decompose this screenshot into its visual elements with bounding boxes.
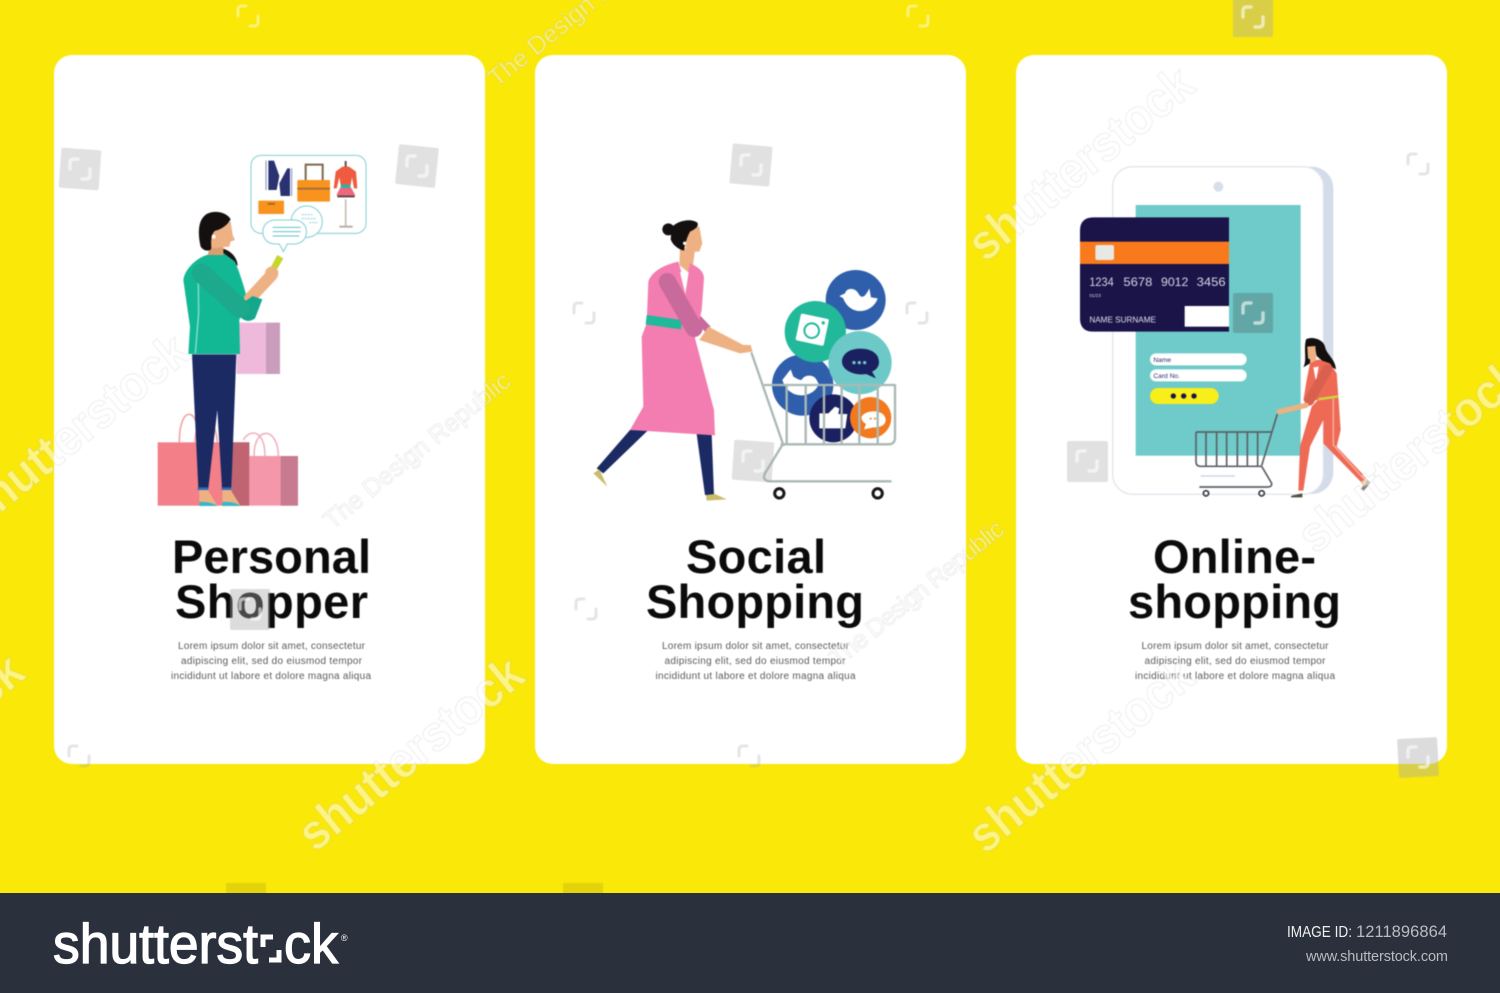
device: tablet — [1113, 167, 1333, 494]
callout: product thought bubble — [251, 155, 366, 252]
website url: www.shutterstock.com — [1305, 949, 1448, 965]
credit card: 5678 — [1123, 276, 1152, 289]
panel: online shopping card — [1016, 55, 1447, 764]
panel: social shopping card — [535, 55, 966, 764]
credit card: 01/23 — [1089, 293, 1101, 298]
figure: woman in coral suit — [1279, 338, 1371, 497]
watermark: shutterstock and design republic overlays: shutterstock — [287, 645, 534, 862]
heading: social shopping: Shopping — [646, 575, 864, 628]
watermark: shutterstock and design republic overlays: shutterstock — [957, 647, 1204, 864]
text block: personal shopper description — [171, 641, 371, 682]
heading: personal shopper: Personal — [172, 530, 371, 583]
watermark: shutterstock and design republic overlays: The Design Republic — [318, 367, 516, 535]
heading: personal shopper: Shopper — [175, 575, 368, 628]
form: name and card fields: Card No. — [1153, 373, 1180, 380]
figure: woman — [183, 212, 283, 506]
text block: personal shopper description: incididunt ut labore et dolore magna aliqua — [171, 671, 371, 682]
text block: online shopping description: incididunt ut labore et dolore magna aliqua — [1135, 671, 1335, 682]
watermark: shutterstock and design republic overlays: shutterstock — [957, 55, 1204, 272]
credit card: NAME SURNAME — [1089, 314, 1156, 324]
icon group: social media bubbles — [772, 270, 892, 442]
panel: personal shopper card — [54, 55, 485, 764]
credit card — [1080, 217, 1229, 332]
text block: social shopping description: Lorem ipsum dolor sit amet, consectetur — [662, 641, 850, 652]
text block: social shopping description — [656, 641, 856, 682]
credit card: 3456 — [1197, 276, 1226, 289]
text block: social shopping description: incididunt ut labore et dolore magna aliqua — [656, 671, 856, 682]
watermark: shutterstock and design republic overlays: The Design Republic — [824, 515, 1010, 673]
text block: online shopping description — [1135, 641, 1335, 682]
illustration: woman pushing cart of social icons — [593, 220, 895, 501]
icon: shopping cart — [1196, 414, 1277, 496]
text block: social shopping description: adipiscing elit, sed do eiusmod tempor — [664, 656, 846, 667]
image id: 1211896864 — [1356, 923, 1447, 941]
image id — [1287, 923, 1447, 941]
form: name and card fields: Name — [1153, 357, 1171, 364]
logo: shutterstock: shutterst — [53, 912, 258, 975]
illustration: woman with shopping bags and phone — [158, 155, 366, 506]
heading: social shopping: Social — [686, 530, 826, 583]
heading: online shopping: shopping — [1128, 575, 1341, 628]
text block: personal shopper description: Lorem ipsum dolor sit amet, consectetur — [178, 641, 366, 652]
logo: shutterstock: ® — [341, 933, 348, 943]
text block: online shopping description: Lorem ipsum dolor sit amet, consectetur — [1142, 641, 1329, 652]
illustration: tablet with credit card and shopper — [1080, 167, 1371, 497]
icon: shopping bags — [158, 323, 298, 506]
heading: social shopping — [646, 530, 864, 628]
form: name and card fields — [1150, 353, 1247, 404]
heading: online shopping — [1128, 530, 1341, 628]
figure: woman — [593, 220, 753, 501]
heading: personal shopper — [172, 530, 371, 628]
credit card: 1234 — [1089, 276, 1114, 289]
icon: shopping cart — [752, 353, 895, 498]
text block: online shopping description: adipiscing elit, sed do eiusmod tempor — [1144, 656, 1326, 667]
logo: shutterstock: ck — [284, 912, 339, 975]
image id: IMAGE ID: — [1287, 924, 1352, 941]
footer bar — [0, 893, 1500, 993]
credit card: 9012 — [1161, 276, 1188, 289]
text block: personal shopper description: adipiscing elit, sed do eiusmod tempor — [181, 656, 363, 667]
heading: online shopping: Online- — [1153, 530, 1316, 583]
